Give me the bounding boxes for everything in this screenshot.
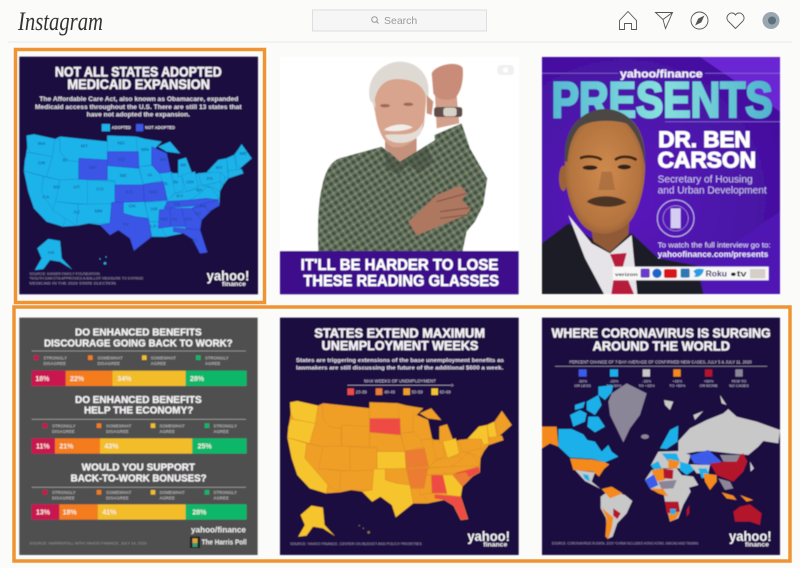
divider — [8, 42, 792, 43]
map labels: MI — [181, 163, 187, 169]
region: Northern Europe — [660, 426, 678, 449]
legend — [347, 379, 453, 395]
logo: yahoo finance: finance — [483, 542, 508, 548]
source note: SOURCE: HARRISPOLL WITH YAHOO FINANCE, JULY 14, 2020 — [29, 541, 147, 545]
poll 2: AGREE — [213, 429, 229, 434]
icon: home — [620, 12, 636, 30]
panel: coronavirus world map — [542, 318, 780, 555]
poll 3: SOMEWHAT — [159, 490, 185, 495]
icon: avatar — [762, 12, 780, 29]
logo strip — [613, 267, 769, 280]
subtitle: PERCENT CHANGE OF 7-DAY AVERAGE OF CONFIRMED NEW CASES, JULY 5 & JULY 11, 2020 — [569, 359, 752, 364]
poll 2: HELP THE ECONOMY? — [84, 406, 193, 417]
region: Mongolia — [720, 455, 740, 462]
map labels: CA — [42, 194, 50, 200]
icon: watermark — [497, 65, 514, 75]
region: Mexico and Central America — [575, 470, 601, 489]
poll 1: 22% — [70, 376, 85, 383]
source note: SOURCE: CORONAVIRUS IN DATA, 2020 *CHINA INCLUDES HONG KONG, MACAU AND TAIWAN — [552, 541, 699, 545]
map labels: SC — [195, 211, 202, 217]
region: Southeast Asia — [718, 462, 754, 502]
highlight: bottom row orange frame — [14, 307, 790, 561]
map labels: AK — [48, 250, 55, 256]
region: Canada — [558, 385, 618, 462]
caption bar: THESE READING GLASSES — [303, 273, 499, 290]
logo: The Harris Poll: The Harris Poll — [202, 537, 247, 546]
map labels: MO — [149, 189, 157, 195]
job title — [658, 175, 767, 196]
region: Europe — [651, 451, 691, 470]
job title: Secretary of Housing — [658, 175, 753, 186]
highlight: top left orange frame — [16, 50, 264, 302]
logo: yahoo finance: yahoo! — [467, 528, 510, 544]
poll 3: AGREE — [159, 496, 175, 501]
map labels: PA — [207, 176, 214, 182]
legend: -15% — [610, 379, 619, 383]
poll 2: 25% — [198, 444, 212, 451]
poll 3: DISAGREE — [52, 496, 75, 501]
map labels: ME — [240, 151, 248, 157]
icon: HUD seal — [657, 200, 694, 237]
legend: OR MORE — [700, 384, 718, 388]
poll 3: WOULD YOU SUPPORT — [82, 463, 196, 474]
map labels: LA — [150, 224, 157, 230]
legend: TO -50% — [606, 384, 622, 388]
map: US states — [24, 134, 252, 270]
poll 2: 21% — [59, 444, 74, 451]
logo strip: Roku — [706, 269, 727, 279]
icon: heart — [727, 13, 744, 28]
legend: NOT ADOPTED — [145, 125, 175, 130]
region: Australia — [733, 504, 762, 525]
region: India — [703, 473, 717, 490]
logo: yahoo finance: finance — [745, 542, 770, 548]
region: China — [710, 453, 747, 482]
panel: unemployment weeks map — [280, 318, 519, 555]
map labels: TX — [122, 222, 130, 228]
poll 3: SOMEWHAT — [106, 490, 132, 495]
icon: Hawaii islands — [359, 525, 370, 534]
legend: -15% — [642, 379, 652, 383]
map labels: IA — [147, 173, 153, 179]
poll 1: 34% — [117, 376, 132, 383]
map labels: AL — [172, 217, 178, 223]
region: Central Asia — [689, 450, 722, 466]
region: Greenland — [608, 383, 647, 442]
map labels: KS — [126, 189, 133, 195]
panel: reading glasses photo — [280, 57, 519, 294]
legend — [102, 124, 175, 131]
map labels: NY — [216, 165, 223, 171]
poll 1: STRONGLY — [43, 355, 67, 360]
poll 1 — [32, 328, 247, 386]
legend: NO CASES — [729, 384, 749, 388]
poll 3: STRONGLY — [52, 490, 76, 495]
heading: UNEMPLOYMENT WEEKS — [322, 339, 478, 353]
legend: 20-39 — [356, 389, 367, 394]
map labels: NC — [200, 203, 207, 209]
map labels: ND — [117, 140, 125, 146]
poll 2: STRONGLY — [52, 423, 76, 428]
region: Russia — [678, 409, 780, 455]
heading: NOT ALL STATES ADOPTED — [55, 63, 222, 79]
map labels: MN — [141, 147, 149, 153]
region: Arctic islands — [664, 395, 727, 420]
map labels: KY — [177, 193, 184, 199]
legend: MAX WEEKS OF UNEMPLOYMENT — [364, 379, 436, 384]
heading: AROUND THE WORLD — [593, 338, 730, 353]
poll 1: DISAGREE — [97, 361, 120, 366]
map labels: WY — [89, 165, 98, 171]
poll 2: DISAGREE — [106, 429, 129, 434]
map labels: OR — [38, 160, 46, 166]
description text — [296, 358, 504, 372]
heading — [314, 326, 485, 353]
logo: yahoo finance: yahoo! — [207, 268, 249, 284]
region: Middle East — [680, 462, 710, 488]
legend — [574, 369, 749, 388]
region: Alaska — [542, 427, 558, 448]
panel: Medicaid expansion map — [19, 57, 258, 294]
poll 3: AGREE — [213, 496, 229, 501]
map labels: ID — [62, 158, 68, 164]
poll 1: AGREE — [205, 361, 220, 366]
region: United States — [570, 458, 609, 477]
region: Africa — [645, 468, 691, 522]
description text: have not adopted the expansion. — [87, 113, 190, 119]
search box — [312, 10, 486, 31]
name: CARSON — [658, 147, 756, 172]
source note: SOURCE: KAISER FAMILY FOUNDATION — [29, 272, 101, 276]
map labels: OH — [186, 179, 194, 185]
map labels: OK — [129, 203, 136, 209]
map labels: AR — [150, 207, 158, 213]
description text: Medicaid access throughout the U.S. There are still 13 states that — [35, 105, 242, 111]
source note: *SOUTH DAKOTA APPROVED A BALLOT MEASURE TO EXPAND — [29, 277, 144, 281]
caption bar: IT'LL BE HARDER TO LOSE — [301, 257, 498, 274]
logo strip: verizon — [615, 272, 638, 278]
poll 3: 28% — [192, 510, 207, 517]
map labels: VA — [196, 188, 203, 194]
logo: The Harris Poll — [190, 537, 247, 548]
map labels — [38, 140, 248, 256]
poll 1: SOMEWHAT — [97, 355, 123, 360]
poll 2 — [32, 395, 247, 454]
icon: direct message — [656, 12, 672, 28]
legend: TO +50% — [669, 384, 686, 388]
description text: lawmakers are still discussing the future of the additional $600 a week. — [296, 366, 504, 372]
legend: 50-59 — [412, 389, 423, 394]
job title: and Urban Development — [658, 185, 767, 196]
legend: FEW TO — [732, 379, 746, 383]
map labels: UT — [73, 184, 80, 190]
poll 1: STRONGLY — [205, 355, 229, 360]
map labels: MS — [160, 217, 168, 223]
description text: States are triggering extensions of the base unemployment benefits as — [296, 358, 504, 364]
poll 1: DO ENHANCED BENEFITS — [75, 328, 202, 339]
legend: 60-69 — [440, 389, 451, 394]
map: world — [542, 383, 780, 539]
logo: yahoo finance: yahoo/finance — [620, 69, 703, 81]
logo strip: ●tv — [730, 270, 747, 279]
poll 2: DO ENHANCED BENEFITS — [75, 395, 202, 406]
poll 3: DISAGREE — [106, 496, 129, 501]
heading: MEDICAID EXPANSION — [67, 76, 210, 92]
poll 1: DISCOURAGE GOING BACK TO WORK? — [44, 338, 233, 349]
map labels: SD — [118, 157, 126, 163]
call to action — [658, 242, 771, 259]
map labels: IN — [173, 179, 179, 185]
poll 1: SOMEWHAT — [151, 355, 176, 360]
poll 3: STRONGLY — [213, 490, 237, 495]
map labels: TN — [173, 202, 180, 208]
legend: +50% — [704, 379, 714, 383]
poll 1: DISAGREE — [43, 361, 66, 366]
panel: enhanced benefits poll — [19, 318, 258, 555]
region: Iceland — [641, 434, 649, 439]
poll 1: 28% — [190, 376, 205, 383]
poll 1: 18% — [35, 376, 50, 383]
heading: STATES EXTEND MAXIMUM — [314, 326, 485, 340]
region: South America — [601, 487, 632, 539]
map labels: GA — [185, 217, 192, 223]
legend: OR LESS — [574, 384, 591, 388]
logo: yahoo finance: finance — [222, 282, 247, 288]
source note: SOURCE: YAHOO FINANCE, CENTER ON BUDGET AND POLICY PRIORITIES — [290, 541, 422, 546]
poll 3: 41% — [102, 510, 117, 517]
poll 2: STRONGLY — [213, 423, 237, 428]
logo: yahoo finance: yahoo/finance — [191, 524, 246, 534]
poll 2: SOMEWHAT — [106, 423, 132, 428]
map labels: WA — [38, 141, 46, 147]
legend: +15% — [672, 379, 683, 383]
poll 3: 13% — [36, 510, 51, 517]
search box: Search — [384, 15, 417, 27]
map labels: FL — [192, 238, 198, 244]
map labels: NM — [94, 209, 102, 215]
call to action: yahoofinance.com/presents — [658, 250, 769, 259]
call to action: To watch the full interview go to: — [658, 242, 771, 249]
heading: WHERE CORONAVIRUS IS SURGING — [552, 326, 771, 341]
map labels: IL — [164, 181, 169, 187]
source note: MEDICAID IN THE 2020 STATE ELECTION — [29, 281, 117, 285]
legend: TO +15% — [639, 384, 655, 388]
legend: 40-49 — [384, 389, 396, 394]
poll 2: 11% — [36, 444, 50, 451]
source note — [29, 272, 144, 285]
poll 2: DISAGREE — [52, 429, 75, 434]
poll 2: SOMEWHAT — [159, 423, 185, 428]
legend: -50% — [578, 379, 588, 383]
map: US states — [287, 401, 512, 537]
map labels: CO — [96, 187, 104, 193]
logo: Instagram wordmark: Instagram — [17, 7, 103, 36]
name: DR. BEN — [658, 127, 751, 152]
header: Instagram top bar — [17, 7, 780, 36]
description text — [35, 97, 242, 119]
heading — [55, 63, 222, 92]
photo: man pointing at wrist — [318, 62, 487, 251]
poll 2: AGREE — [159, 429, 175, 434]
map labels: WI — [160, 157, 166, 163]
description text: The Affordable Care Act, also known as Obamacare, expanded — [39, 97, 239, 103]
name — [658, 127, 756, 172]
icon: compass — [691, 12, 708, 29]
poll 3 — [32, 463, 247, 520]
poll 2: 43% — [104, 444, 119, 451]
icon: Hawaii islands — [99, 256, 107, 265]
map labels: NV — [53, 184, 61, 190]
poll 3: 18% — [63, 510, 77, 517]
poll 3: BACK-TO-WORK BONUSES? — [71, 474, 207, 485]
logo: yahoo finance: yahoo! — [729, 528, 772, 544]
map labels: MT — [81, 143, 88, 149]
portrait — [542, 109, 703, 294]
poll 1: AGREE — [151, 361, 166, 366]
map labels: NE — [120, 173, 127, 179]
map labels: AZ — [73, 209, 80, 215]
panel: Yahoo Finance Presents Dr. Ben Carson — [542, 57, 780, 294]
legend: ADOPTED — [112, 125, 131, 130]
caption bar — [280, 251, 519, 294]
heading — [552, 326, 771, 353]
